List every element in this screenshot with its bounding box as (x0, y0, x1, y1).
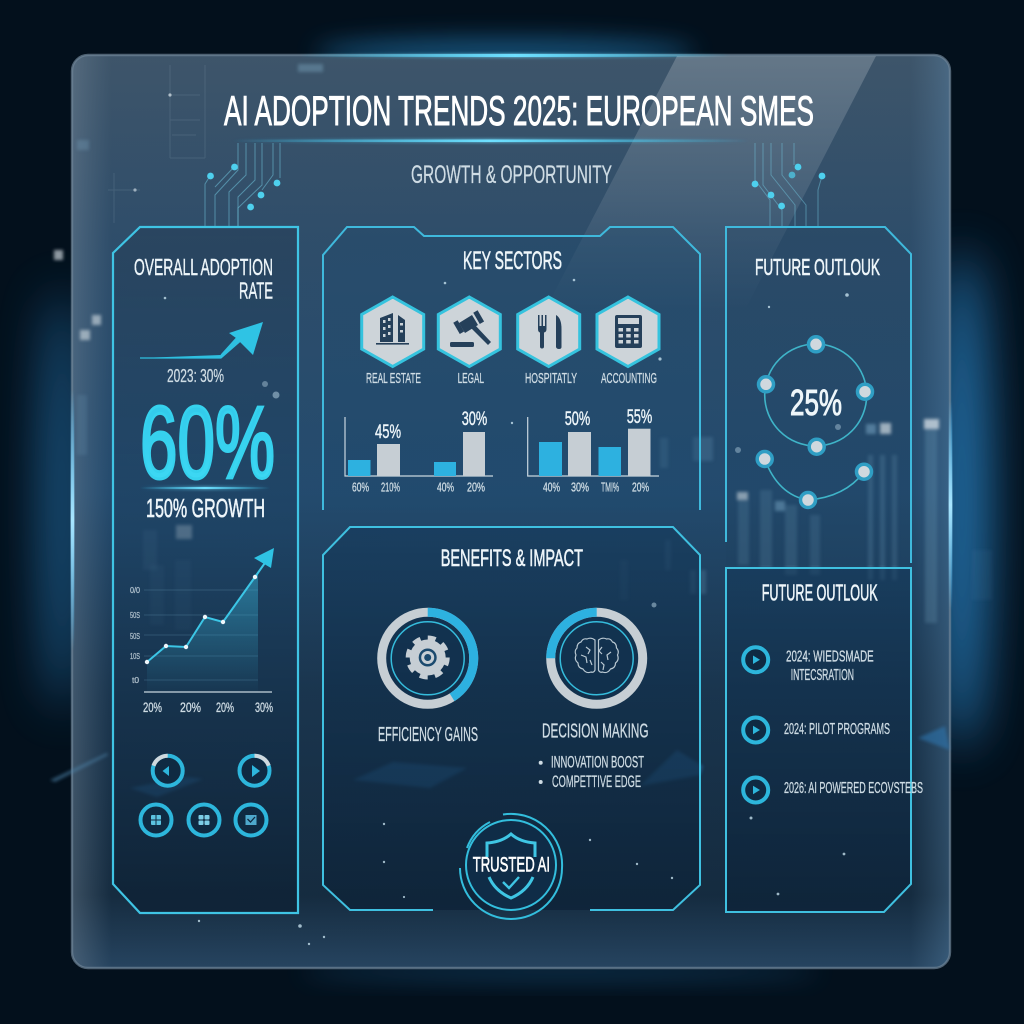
timeline item 1: INTECSRATION (791, 667, 854, 684)
bullet list (539, 753, 644, 791)
heading: overall adoption rate: OVERALL ADOPTION (134, 254, 273, 280)
floating parallelograms (50, 726, 950, 797)
panel: overall adoption rate (113, 227, 298, 913)
icon: gear (408, 638, 447, 677)
icon: hospitality cutlery (518, 297, 580, 366)
icon: trend arrow (140, 322, 263, 358)
faint schematic lines (108, 65, 205, 223)
bar chart: right: 55% (627, 407, 652, 428)
bar chart: right: 40% (543, 480, 560, 495)
node ring diagram: 25% (790, 382, 842, 423)
line chart: 50S (130, 611, 140, 620)
bar chart: left: 45% (375, 422, 401, 443)
glass panel (71, 54, 952, 968)
sector labels: HOSPITATLY (525, 370, 577, 387)
panel: future outlook timeline (726, 568, 923, 912)
heading: future outlook: FUTURE OUTLOUK (755, 254, 880, 280)
bullet list: COMPETTIVE EDGE (552, 772, 641, 791)
bullet list: INNOVATION BOOST (551, 753, 644, 772)
donut: efficiency gains (382, 612, 474, 704)
icon: accounting calculator (597, 297, 659, 366)
donut: decision making (551, 612, 643, 704)
line chart: t0 (132, 676, 140, 685)
icon: real estate (362, 297, 424, 366)
heading: overall adoption rate: RATE (239, 278, 273, 304)
panel: future outlook gauge (726, 227, 911, 565)
circuit traces left (205, 143, 280, 226)
bar chart: left: 60% (352, 480, 369, 495)
bar chart: left: 40% (437, 480, 454, 495)
bar chart: right (528, 407, 659, 495)
line chart: 20% (143, 699, 162, 715)
big number: 60%: 60% (140, 385, 275, 500)
badge: trusted ai: TRUSTED AI (473, 854, 550, 877)
heading: future outlook: FUTURE OUTLOUK (762, 580, 878, 606)
subtitle: GROWTH & OPPORTUNITY (411, 161, 612, 189)
line chart: 30% (255, 699, 273, 715)
bar chart: right: 50% (565, 409, 590, 430)
circuit traces right (752, 143, 825, 226)
line chart: 20% (216, 699, 234, 715)
sparkles (164, 279, 849, 945)
label: decision making: DECISION MAKING (542, 721, 648, 743)
icon: legal gavel (438, 297, 500, 366)
sector labels: REAL ESTATE (366, 370, 421, 387)
sector labels: ACCOUNTING (601, 370, 657, 387)
heading: benefits and impact: BENEFITS & IMPACT (441, 545, 583, 572)
bar chart: left: 30% (462, 409, 487, 430)
title divider glow (232, 140, 749, 142)
text: 150% growth: 150% GROWTH (146, 493, 265, 523)
line chart (130, 548, 274, 715)
blurred skyline background (54, 64, 992, 630)
glass reflection (545, 56, 876, 310)
text: 2023 value: 2023: 30% (167, 366, 224, 386)
timeline item 2: 2024: PILOT PROGRAMS (784, 721, 890, 738)
icon: check button (236, 804, 266, 836)
heading: key sectors: KEY SECTORS (463, 247, 562, 275)
timeline item 3 (743, 778, 923, 802)
icon: shield (487, 834, 535, 898)
icon: next button (240, 756, 270, 786)
line chart: 20% (180, 699, 201, 715)
bar chart: right: 20% (632, 480, 649, 495)
line chart: 10S (130, 652, 140, 661)
bar chart: left: 20% (467, 480, 485, 495)
bar chart: right: TMI% (601, 480, 619, 495)
label: efficiency gains: EFFICIENCY GAINS (378, 724, 478, 746)
icon: grid button (188, 804, 220, 836)
timeline item 1: 2024: WIEDSMADE (786, 649, 874, 666)
icon: brain (575, 638, 618, 673)
badge: trusted ai (460, 814, 562, 919)
sector labels: LEGAL (458, 370, 484, 387)
timeline item 2 (743, 718, 890, 742)
line chart: 50S (130, 632, 140, 641)
bar chart: left: 210% (381, 480, 400, 495)
panel: key sectors (323, 227, 700, 510)
heading: overall adoption rate (134, 254, 273, 304)
divider glow (140, 487, 270, 489)
icon: previous button (153, 756, 183, 786)
line chart: 0/0 (130, 586, 140, 595)
panel: benefits and impact (323, 527, 700, 919)
bar chart: left (345, 409, 493, 495)
sector labels (366, 370, 657, 387)
bar chart: right: 30% (571, 480, 589, 495)
node ring diagram (757, 337, 872, 508)
icon: calendar button (140, 804, 172, 836)
timeline item 1 (743, 647, 874, 684)
